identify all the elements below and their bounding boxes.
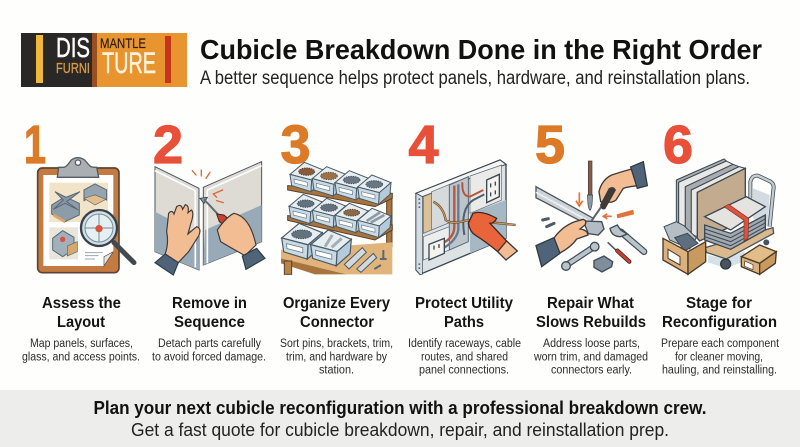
step 4 heading: Paths xyxy=(444,314,484,331)
step 6 heading xyxy=(662,295,777,331)
step 3 number: 3 xyxy=(280,115,311,175)
step 3 heading: Organize Every xyxy=(283,295,390,312)
step 4 heading xyxy=(415,295,513,331)
step 3 heading: Connector xyxy=(300,314,374,331)
step 3 text xyxy=(280,338,393,376)
step 4 text xyxy=(408,338,521,376)
logo: FURNI xyxy=(56,60,90,77)
step 2 heading: Sequence xyxy=(174,314,245,331)
title: Cubicle Breakdown Done in the Right Order xyxy=(200,34,762,65)
step 2 text: Detach parts carefully xyxy=(158,338,261,350)
step 5 text: connectors early. xyxy=(551,364,632,376)
step 1 heading: Layout xyxy=(57,314,106,331)
icon: shelves of sorted hardware bins xyxy=(281,162,392,274)
step 5 heading: Slows Rebuilds xyxy=(536,314,646,331)
step 4 heading: Protect Utility xyxy=(415,295,513,312)
step 6 heading: Reconfiguration xyxy=(662,314,777,331)
footer call to action: Get a fast quote for cubicle breakdown, repair, and reinstallation prep. xyxy=(131,420,669,440)
step 1 text xyxy=(22,338,140,364)
step 2 text: to avoid forced damage. xyxy=(152,352,266,364)
logo: TURE xyxy=(102,47,156,80)
step 5 text: Address loose parts, xyxy=(543,338,640,350)
logo: DIS xyxy=(56,32,90,63)
step 4 text: panel connections. xyxy=(419,364,509,376)
step 1 heading: Assess the xyxy=(42,295,121,312)
logo: MANTLE xyxy=(100,35,146,51)
footer call to action: Plan your next cubicle reconfiguration with a professional breakdown crew. xyxy=(94,398,706,418)
step 1 number: 1 xyxy=(24,115,46,175)
step 6 text: Prepare each component xyxy=(661,338,780,350)
step 5 text xyxy=(533,338,648,376)
step 5 text: worn trim, and damaged xyxy=(533,352,648,364)
step 5 number: 5 xyxy=(535,115,565,175)
step 4 number: 4 xyxy=(408,115,439,175)
step 1 text: Map panels, surfaces, xyxy=(30,338,133,350)
step 2 number: 2 xyxy=(153,115,183,175)
step 6 number: 6 xyxy=(663,115,693,175)
icon: clipboard with floor plan and magnifier xyxy=(38,158,134,273)
icon: hands detaching panels with screwdriver xyxy=(155,162,265,275)
step 5 heading xyxy=(536,295,646,331)
step 6 text: hauling, and reinstalling. xyxy=(662,364,777,376)
step 2 heading xyxy=(172,295,247,331)
step 4 text: routes, and shared xyxy=(421,352,508,364)
step 6 heading: Stage for xyxy=(686,295,752,312)
logo xyxy=(21,32,187,87)
step 5 heading: Repair What xyxy=(547,295,635,312)
step 6 text xyxy=(661,338,780,376)
step 2 text xyxy=(152,338,266,364)
step 3 heading xyxy=(283,295,390,331)
step 4 text: Identify raceways, cable xyxy=(408,338,521,350)
step 1 text: glass, and access points. xyxy=(22,352,140,364)
step 1 heading xyxy=(42,295,121,331)
step 6 text: for cleaner moving, xyxy=(675,352,763,364)
step 2 heading: Remove in xyxy=(172,295,247,312)
step 3 text: Sort pins, brackets, trim, xyxy=(280,338,393,350)
step 3 text: station. xyxy=(319,364,354,376)
step 3 text: trim, and hardware by xyxy=(286,352,387,364)
footer call to action xyxy=(0,390,800,447)
icon: cart stacked with panels and boxes xyxy=(663,159,776,274)
icon: panel with wiring and outlets xyxy=(416,160,517,274)
icon: hands repairing connector with tools xyxy=(536,161,647,272)
